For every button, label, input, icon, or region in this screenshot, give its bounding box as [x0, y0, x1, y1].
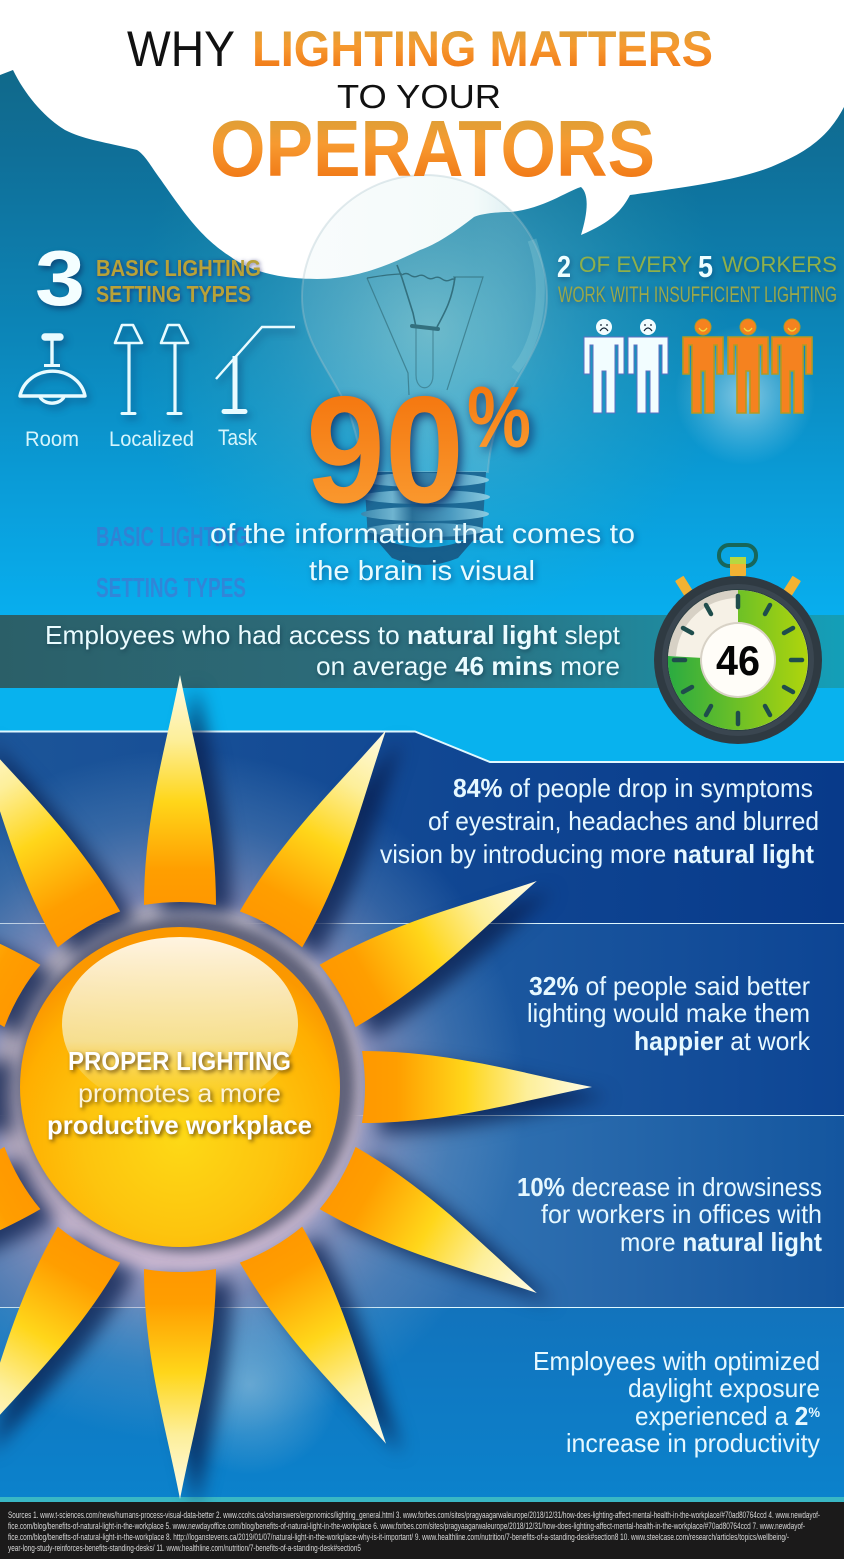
footer: sources: year-long-study-reinforces-benefits-standing-desks/ 11. www.healthline.com/nutrition/7-benefits-of-a-standing-desk#section5	[8, 1543, 361, 1553]
title	[127, 21, 713, 193]
icon: stopwatch	[654, 545, 822, 744]
text: information is visual	[210, 518, 635, 586]
stat: 90%: 90	[306, 365, 464, 535]
stat: 90%: %	[467, 370, 531, 466]
heading: basic lighting setting types	[96, 255, 261, 307]
ghost text: BASIC LIGHTING	[96, 521, 248, 552]
stopwatch ticks	[674, 596, 802, 724]
icon: unhappy worker	[584, 319, 624, 413]
panel: lower stats background	[0, 731, 844, 1499]
icon: task lamp	[216, 327, 295, 412]
stat: 84% eyestrain: vision by introducing more natural light	[380, 839, 814, 869]
stat: 2% productivity: experienced a 2	[635, 1401, 809, 1431]
panel: productivity band	[0, 1307, 844, 1499]
panel: 2 of every 5 workers	[557, 249, 837, 465]
stat: 10% drowsiness: 10% decrease in drowsiness	[517, 1172, 822, 1202]
sun	[0, 675, 592, 1499]
stat: 32% happier	[527, 971, 811, 1056]
stat: 10% drowsiness	[517, 1172, 822, 1257]
heading: 2 of every 5 workers: 5	[698, 249, 713, 284]
stat: 32% happier: lighting would make them	[527, 998, 810, 1028]
background: upper blue gradient	[0, 0, 844, 616]
stat: 84% eyestrain: 84% of people drop in symptoms	[453, 773, 813, 803]
heading: 2 of every 5 workers: WORKERS	[722, 252, 837, 277]
sun highlight	[62, 937, 298, 1111]
sun disc shadow	[20, 918, 354, 1252]
heading: basic lighting setting types: BASIC LIGHTING	[96, 255, 261, 281]
lamp labels: Room	[25, 428, 79, 451]
sun text: promotes a more	[78, 1078, 281, 1108]
title: why: WHY	[127, 21, 235, 77]
icon: happy worker	[683, 319, 723, 413]
heading: basic lighting setting types: SETTING TYPES	[96, 281, 251, 307]
background glow behind bulb	[100, 30, 844, 616]
icon: unhappy worker	[628, 319, 668, 413]
banner: sleep stat	[0, 615, 844, 688]
lamp labels: Task	[218, 425, 258, 450]
title: to your: TO YOUR	[337, 78, 501, 115]
title: lighting matters: LIGHTING MATTERS	[252, 21, 713, 77]
icon: happy worker	[772, 319, 812, 413]
sun ring shading	[0, 903, 364, 1271]
footer: sources	[0, 1502, 844, 1559]
heading: 2 of every 5 workers: 2	[557, 249, 571, 284]
stat: 2% productivity: %	[808, 1404, 821, 1420]
stat: 2% productivity: Employees with optimized	[533, 1346, 820, 1376]
icon: localized lamps	[115, 325, 188, 414]
sun text: productive workplace	[47, 1110, 312, 1140]
panel separators	[0, 732, 844, 1308]
lamp labels: Localized	[109, 428, 194, 451]
heading: 2 of every 5 workers	[557, 249, 837, 307]
sun disc	[20, 927, 340, 1247]
lower light blue strip	[0, 615, 844, 775]
banner: sleep stat: on average 46 mins more	[316, 651, 620, 681]
icon: room lamp	[20, 335, 85, 403]
banner: sleep stat: Employees who had access to natural light slept	[45, 620, 621, 650]
stat: 10% drowsiness: more natural light	[620, 1227, 822, 1257]
panel: drowsiness band	[0, 1115, 844, 1307]
footer rule	[0, 1497, 844, 1502]
panel: eyestrain band	[0, 731, 844, 923]
icon: stopwatch: 46	[716, 637, 760, 684]
sun rays	[0, 675, 592, 1499]
icon: happy worker	[728, 319, 768, 413]
text: information is visual: the brain is visual	[309, 555, 535, 586]
heading: 2 of every 5 workers: OF EVERY	[579, 252, 692, 277]
speech bubble	[0, 0, 844, 279]
stat: 2% productivity: increase in productivity	[566, 1428, 820, 1458]
stopwatch centre	[700, 622, 776, 698]
glow behind happy workers	[675, 325, 815, 465]
text: information is visual: of the information that comes to	[210, 518, 635, 549]
stat: 2% productivity	[533, 1346, 821, 1458]
stat: 84% eyestrain: of eyestrain, headaches and blurred	[428, 806, 819, 836]
stat: 84% eyestrain	[380, 773, 819, 869]
big number 3: 3	[35, 234, 85, 322]
stopwatch crown	[730, 557, 746, 576]
stopwatch side buttons	[675, 576, 801, 596]
lamp labels	[25, 425, 258, 451]
sun text	[47, 1046, 312, 1140]
sun text: PROPER LIGHTING	[68, 1046, 291, 1076]
stat: 32% happier: happier at work	[634, 1026, 811, 1056]
title: operators: OPERATORS	[210, 104, 655, 193]
stat: 2% productivity: daylight exposure	[628, 1373, 820, 1403]
panel: happier band	[0, 923, 844, 1115]
icon: light bulb	[302, 175, 547, 565]
ghost text: SETTING TYPES	[96, 572, 246, 603]
stat: 32% happier: 32% of people said better	[529, 971, 810, 1001]
ghost text	[96, 521, 248, 603]
sun halo	[0, 740, 530, 1497]
stopwatch dial	[668, 590, 808, 730]
panel: 3 basic lighting setting types	[20, 234, 295, 451]
stat: 10% drowsiness: for workers in offices with	[541, 1199, 822, 1229]
stopwatch body	[654, 576, 822, 744]
stopwatch handle	[719, 545, 756, 566]
